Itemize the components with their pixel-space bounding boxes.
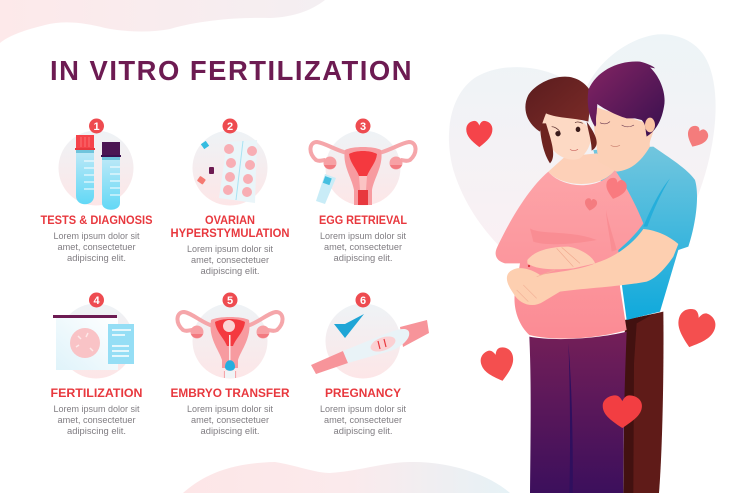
badge 5 [222, 292, 238, 308]
badge 5: 5 [227, 295, 233, 307]
man: hair [588, 61, 665, 137]
badge 1: 1 [93, 121, 100, 133]
badge 4: 4 [93, 295, 100, 307]
heart: on trousers [603, 395, 642, 428]
description: adipiscing elit. [200, 426, 260, 436]
description: Lorem ipsum dolor sit [187, 244, 273, 254]
icon: microscope screen [53, 304, 134, 378]
description: amet, consectetuer [58, 242, 136, 252]
man: trousers [623, 312, 663, 493]
badge 6: 6 [360, 295, 366, 307]
illustration: embracing couple [449, 34, 719, 493]
woman: hair locks [540, 122, 597, 163]
heart: lower left [478, 345, 518, 385]
badge 1 [89, 118, 104, 134]
heart on top: small [584, 198, 598, 212]
woman: hand [527, 247, 595, 269]
heading: PREGNANCY [325, 388, 401, 400]
description: Lorem ipsum dolor sit [54, 231, 140, 241]
heading: FERTILIZATION [50, 388, 142, 400]
heart: lower right [671, 306, 719, 353]
background blob: top [0, 0, 325, 43]
description [54, 404, 140, 436]
description: adipiscing elit. [200, 266, 260, 276]
man: closed eyes and mouth [600, 122, 634, 147]
description: Lorem ipsum dolor sit [320, 231, 406, 241]
heart on top: large [603, 176, 628, 202]
description: Lorem ipsum dolor sit [320, 404, 406, 414]
description: amet, consectetuer [191, 255, 269, 265]
heading: HYPERSTYMULATION [170, 228, 290, 240]
description: adipiscing elit. [67, 426, 126, 436]
heading [170, 215, 290, 240]
description: amet, consectetuer [324, 415, 402, 425]
description [320, 404, 406, 436]
title: IN VITRO FERTILIZATION [50, 55, 413, 86]
description: Lorem ipsum dolor sit [187, 404, 273, 414]
woman: face [542, 113, 591, 160]
description: amet, consectetuer [191, 415, 269, 425]
woman: facial features [552, 122, 583, 151]
heading: EGG RETRIEVAL [319, 215, 407, 227]
step 5: embryo transfer [170, 292, 290, 436]
heart on background: right [683, 124, 710, 151]
icon: pregnancy test [311, 304, 429, 378]
woman: hair [525, 77, 592, 132]
heading: EMBRYO TRANSFER [170, 388, 290, 400]
description: adipiscing elit. [67, 253, 126, 263]
step 1: tests and diagnosis [40, 118, 153, 263]
icon: uterus and syringe [310, 130, 416, 206]
description: adipiscing elit. [334, 253, 392, 263]
description [54, 231, 140, 263]
woman: top [496, 170, 643, 339]
description: amet, consectetuer [324, 242, 402, 252]
description [320, 231, 406, 263]
icon: test tubes [58, 130, 134, 210]
man: neck and face [594, 107, 654, 172]
description [187, 404, 273, 436]
description: amet, consectetuer [58, 415, 136, 425]
heading: TESTS & DIAGNOSIS [40, 215, 153, 227]
step 2: ovarian hyperstymulation [170, 118, 290, 276]
badge 3: 3 [360, 121, 366, 133]
man: arm and hand [507, 229, 678, 305]
icon: pills blister [192, 130, 268, 206]
badge 3 [356, 118, 370, 134]
badge 2: 2 [227, 121, 233, 133]
step 6: pregnancy [311, 292, 429, 436]
heading: OVARIAN [205, 215, 255, 227]
description [187, 244, 273, 276]
badge 4 [89, 292, 104, 308]
step 4: fertilization [50, 292, 142, 436]
man: t-shirt [593, 147, 697, 320]
heart on background: left [466, 121, 492, 147]
background blob: bottom [183, 462, 510, 493]
woman: trousers [529, 332, 627, 493]
large background heart [449, 34, 716, 263]
badge 6 [356, 292, 370, 308]
description: adipiscing elit. [334, 426, 392, 436]
badge 2 [222, 118, 238, 134]
woman: eyes [555, 127, 580, 136]
description: Lorem ipsum dolor sit [54, 404, 140, 414]
man: ear [645, 118, 655, 132]
step 3: egg retrieval [310, 118, 416, 263]
icon: uterus with embryo [177, 304, 283, 378]
woman: neck [548, 153, 615, 184]
